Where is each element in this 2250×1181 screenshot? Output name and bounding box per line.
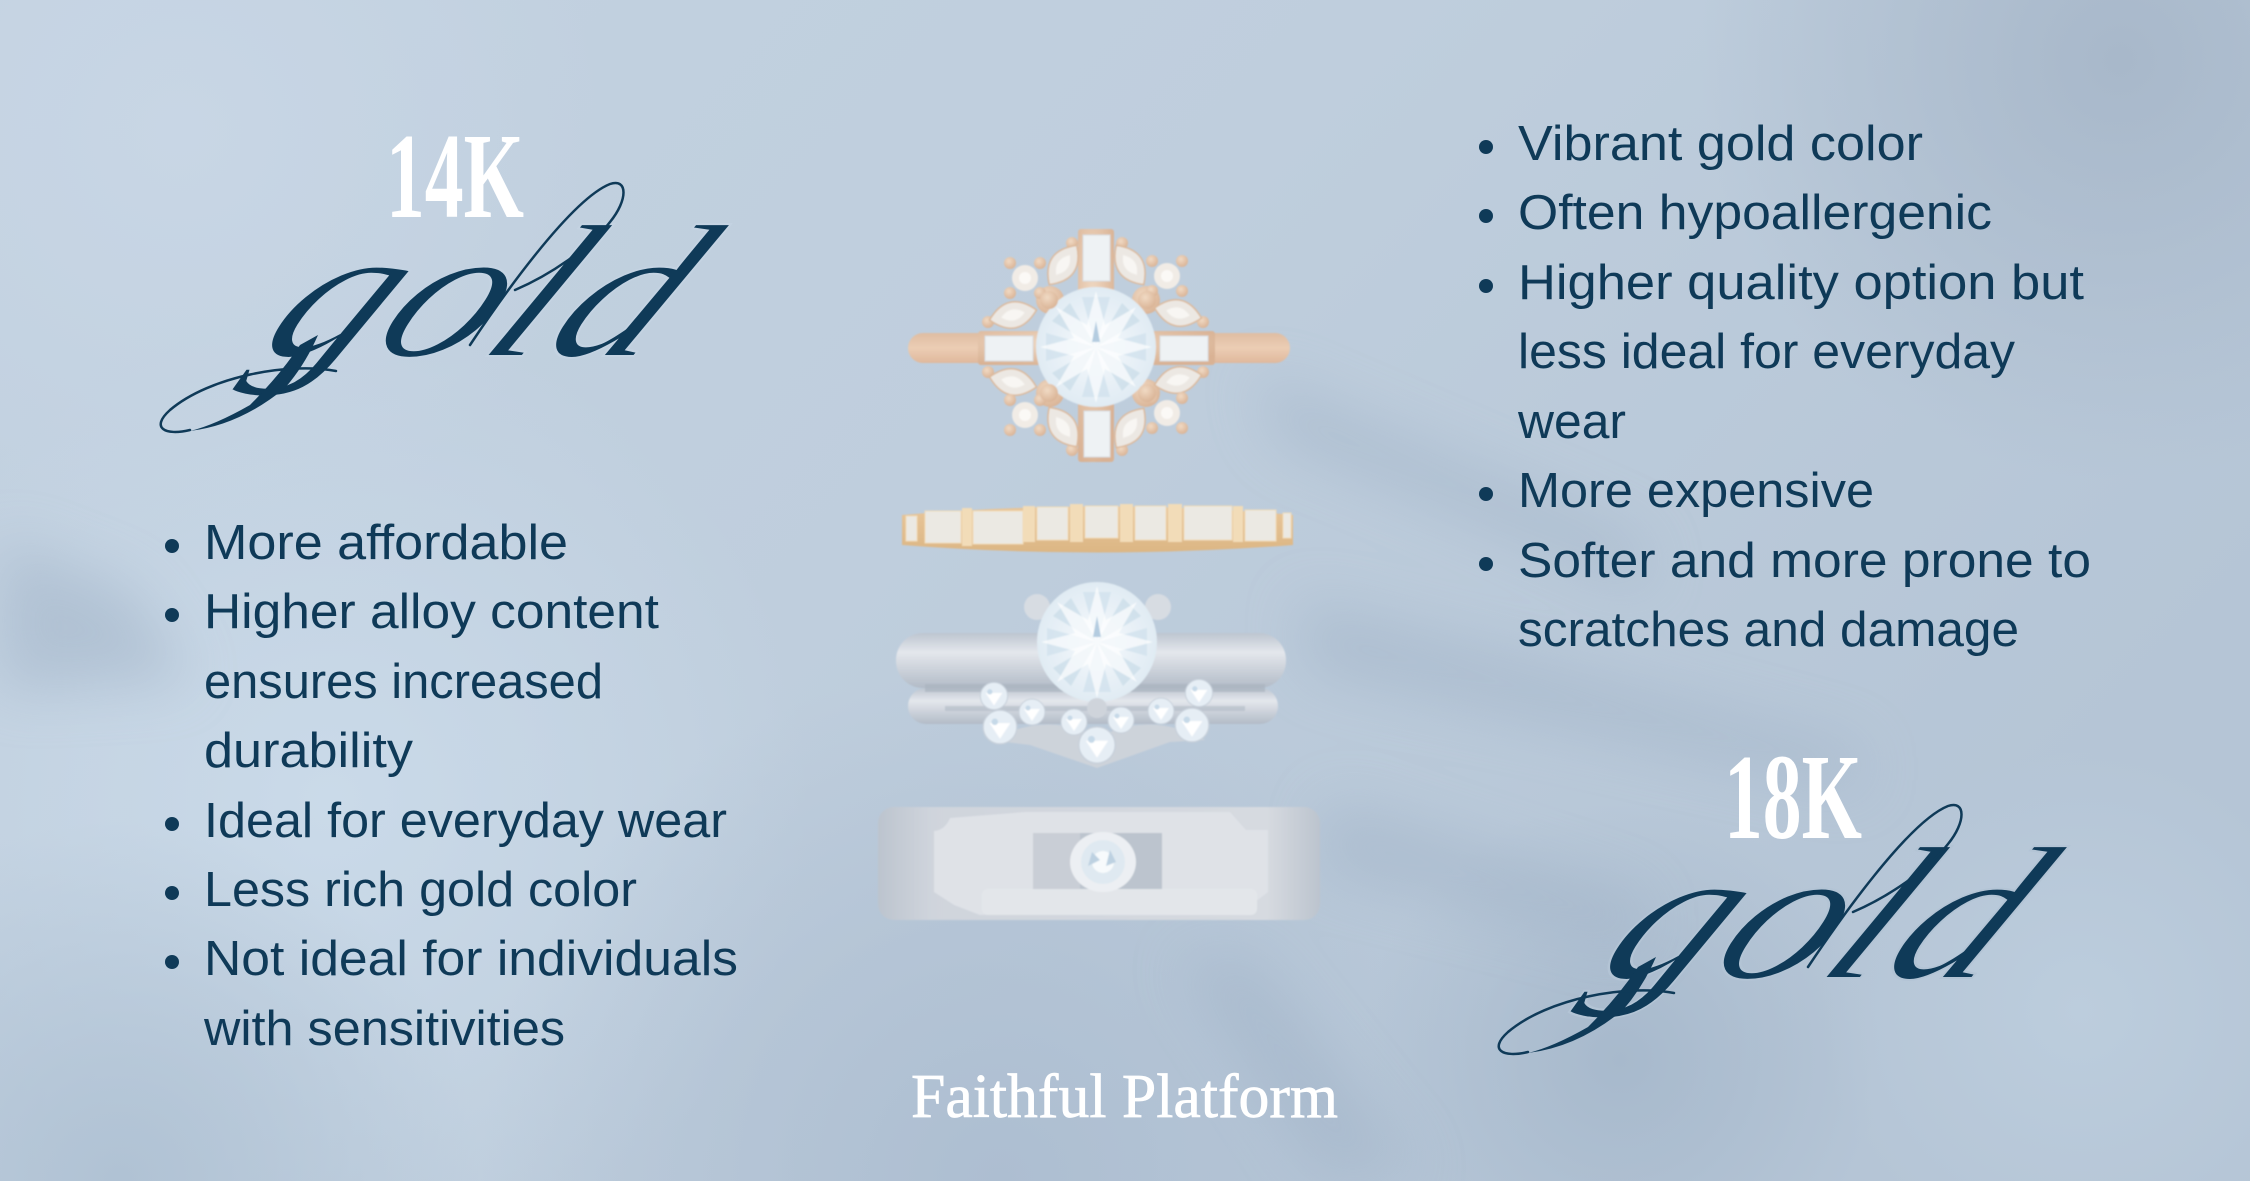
- left column: 14K gold: [161, 109, 755, 1056]
- logo: Faithful Platform: Faithful Platform: [911, 1063, 1338, 1131]
- white gold wide band with bezel diamond: [878, 807, 1320, 920]
- yellow gold baguette band: [902, 504, 1293, 552]
- script heading: gold: [161, 183, 755, 432]
- bullet list: 18K traits: More expensive: [1518, 464, 1874, 518]
- bullet list: 18K traits: Higher quality option but: [1518, 256, 2084, 310]
- bullet list: 18K traits: less ideal for everyday: [1518, 325, 2016, 379]
- bullet list: 14K traits: Higher alloy content: [204, 585, 659, 639]
- bullet list: 14K traits: with sensitivities: [203, 1002, 565, 1056]
- bullet list: 18K traits: Softer and more prone to: [1518, 534, 2091, 588]
- script heading: gold: gold: [226, 187, 755, 397]
- heading: 14K: 14K: [386, 109, 524, 244]
- bullet list: 14K traits: Not ideal for individuals: [204, 932, 738, 986]
- bullet list: 14K traits: [165, 516, 738, 1056]
- bullet list: 18K traits: wear: [1517, 395, 1626, 449]
- bullet list: 14K traits: More affordable: [204, 516, 568, 570]
- right column: 18K gold: [1479, 117, 2093, 1054]
- bullet list: 14K traits: durability: [204, 724, 414, 778]
- bullet list: 18K traits: scratches and damage: [1518, 603, 2019, 657]
- rose gold ring with diamond cluster: [908, 229, 1290, 462]
- bullet list: 18K traits: Often hypoallergenic: [1518, 186, 1992, 240]
- bullet list: 14K traits: ensures increased: [204, 655, 603, 709]
- bullet list: 14K traits: Less rich gold color: [204, 863, 637, 917]
- bullet list: 18K traits: [1479, 117, 2091, 657]
- heading: 18K: 18K: [1724, 730, 1862, 865]
- script heading: gold: [1499, 805, 2093, 1054]
- bullet list: 18K traits: Vibrant gold color: [1518, 117, 1923, 171]
- bullet list: 14K traits: Ideal for everyday wear: [204, 794, 727, 848]
- white gold solitaire with stacked diamond band: [896, 582, 1286, 768]
- script heading: gold: gold: [1564, 809, 2093, 1019]
- center rings: [878, 229, 1320, 920]
